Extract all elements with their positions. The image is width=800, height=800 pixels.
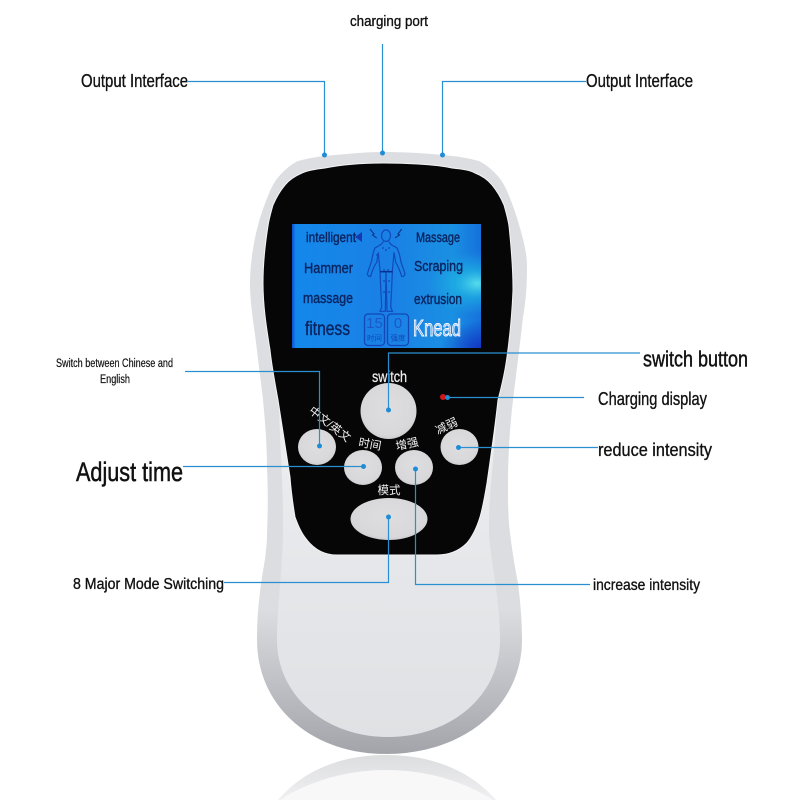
timer box: 时间 bbox=[367, 332, 382, 342]
massager device bbox=[250, 152, 527, 754]
control buttons bbox=[298, 383, 478, 540]
human figure bbox=[367, 229, 405, 311]
screen labels: extrusion bbox=[414, 292, 462, 308]
button labels: 减弱 bbox=[434, 416, 460, 437]
intensity box bbox=[388, 314, 408, 346]
button: mode bbox=[350, 498, 428, 540]
screen labels: Hammer bbox=[304, 261, 353, 277]
label: charging port: charging port bbox=[350, 13, 429, 30]
button labels: 时间 bbox=[357, 436, 382, 453]
screen labels: Knead bbox=[413, 315, 461, 341]
line: charging bbox=[445, 395, 584, 400]
timer box: 15 bbox=[366, 315, 383, 332]
label: charging display: Charging display bbox=[598, 389, 707, 409]
line: charging port bbox=[380, 44, 385, 156]
label: switch button: switch button bbox=[643, 346, 748, 372]
button: time bbox=[344, 450, 382, 485]
device reflection bbox=[278, 755, 496, 800]
screen labels: intelligent bbox=[306, 229, 356, 245]
pointer triangle bbox=[355, 232, 362, 242]
line: mode bbox=[224, 514, 391, 582]
intensity box: 0 bbox=[394, 315, 402, 332]
charging LED bbox=[440, 394, 446, 400]
button labels: 增强 bbox=[394, 435, 420, 453]
timer box bbox=[364, 314, 384, 346]
button: increase bbox=[395, 450, 433, 485]
label: language switch: Switch between Chinese and bbox=[56, 358, 173, 370]
line: adjust time bbox=[183, 464, 366, 469]
button labels: switch bbox=[372, 369, 407, 386]
line: reduce bbox=[456, 445, 598, 450]
LCD screen bbox=[292, 224, 481, 348]
label: mode switching: 8 Major Mode Switching bbox=[73, 576, 224, 593]
screen labels: massage bbox=[303, 291, 353, 307]
screen labels: Massage bbox=[416, 229, 460, 245]
label: language switch: English bbox=[100, 374, 130, 386]
screen labels: Scraping bbox=[414, 259, 463, 275]
button labels bbox=[306, 369, 460, 497]
button: switch bbox=[360, 383, 416, 439]
screen labels: fitness bbox=[305, 319, 350, 340]
button labels: 中文/英文 bbox=[306, 403, 354, 445]
line: language bbox=[185, 372, 322, 448]
button labels: 模式 bbox=[378, 484, 401, 497]
device shell bbox=[250, 152, 527, 754]
label: output interface left: Output Interface bbox=[81, 71, 188, 91]
intensity box: 强度 bbox=[390, 332, 406, 342]
button: language bbox=[298, 429, 336, 465]
line: right output bbox=[440, 82, 586, 158]
line: switch bbox=[386, 353, 640, 412]
label: increase intensity: increase intensity bbox=[593, 577, 700, 594]
label: output interface right: Output Interface bbox=[586, 71, 693, 91]
lower panel highlight bbox=[277, 395, 500, 737]
leader lines bbox=[183, 44, 640, 584]
label: language switch bbox=[56, 358, 173, 386]
label: reduce intensity: reduce intensity bbox=[598, 439, 713, 460]
line: increase bbox=[413, 466, 590, 584]
label: adjust time: Adjust time bbox=[76, 457, 183, 487]
line: left output bbox=[188, 82, 327, 158]
button: reduce bbox=[440, 429, 478, 465]
black control face bbox=[263, 163, 513, 555]
screen labels bbox=[303, 229, 463, 341]
